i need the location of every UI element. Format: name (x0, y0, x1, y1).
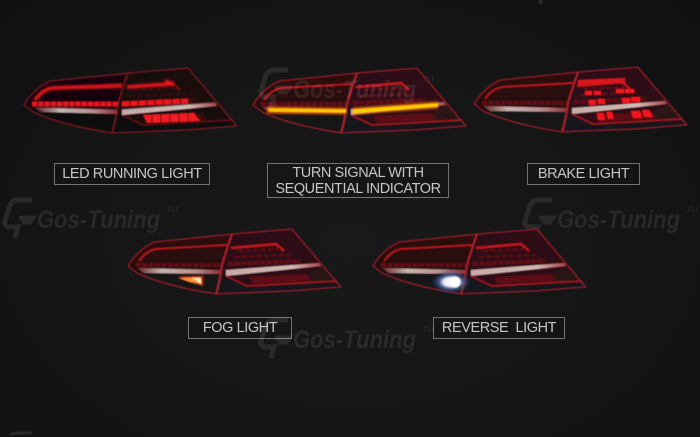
watermark: right: Gos-Tuning (557, 206, 680, 234)
red LED row (32, 102, 119, 106)
lamp: reverse light (373, 229, 586, 294)
label: brake light (527, 163, 640, 185)
watermark: left: .ru (165, 203, 178, 215)
lamp: fog light (128, 229, 341, 294)
chrome strips (36, 108, 117, 114)
lamp: LED running light (24, 68, 237, 133)
lower red blocks (143, 113, 200, 123)
watermark: lower centre (258, 318, 434, 358)
label: fog light: FOG LIGHT (203, 320, 277, 336)
fog lamp glow (177, 276, 203, 286)
watermark: upper centre: Gos-Tuning (293, 76, 416, 104)
watermark: lower centre: .ru (421, 323, 434, 335)
watermark fragment: bottom edge (10, 433, 32, 435)
label: reverse light (433, 317, 565, 339)
watermark: left (2, 198, 178, 238)
watermark: lower centre: Gos-Tuning (293, 326, 416, 354)
watermark: right: .ru (685, 203, 698, 215)
brake light blocks (578, 78, 653, 120)
watermark: right (522, 198, 698, 234)
upper light strip (35, 81, 174, 100)
yellow indicator strips (267, 105, 438, 111)
label: reverse light: REVERSE LIGHT (442, 320, 556, 336)
lamp: turn signal (253, 68, 466, 133)
lamp: brake light (474, 67, 687, 132)
label: LED running light (54, 163, 210, 185)
label: fog light (188, 317, 292, 339)
label: turn signal (267, 163, 449, 198)
watermark: upper centre: .ru (421, 73, 434, 85)
label: turn signal: TURN SIGNAL WITH (292, 164, 424, 180)
watermark: upper centre (258, 68, 434, 108)
label: LED running light: LED RUNNING LIGHT (62, 166, 202, 182)
reverse lamp glow (430, 270, 472, 294)
label: turn signal: SEQUENTIAL INDICATOR (275, 180, 441, 196)
watermark fragment: top edge (540, 0, 541, 4)
watermark: left: Gos-Tuning (37, 206, 160, 234)
label: brake light: BRAKE LIGHT (538, 166, 629, 182)
